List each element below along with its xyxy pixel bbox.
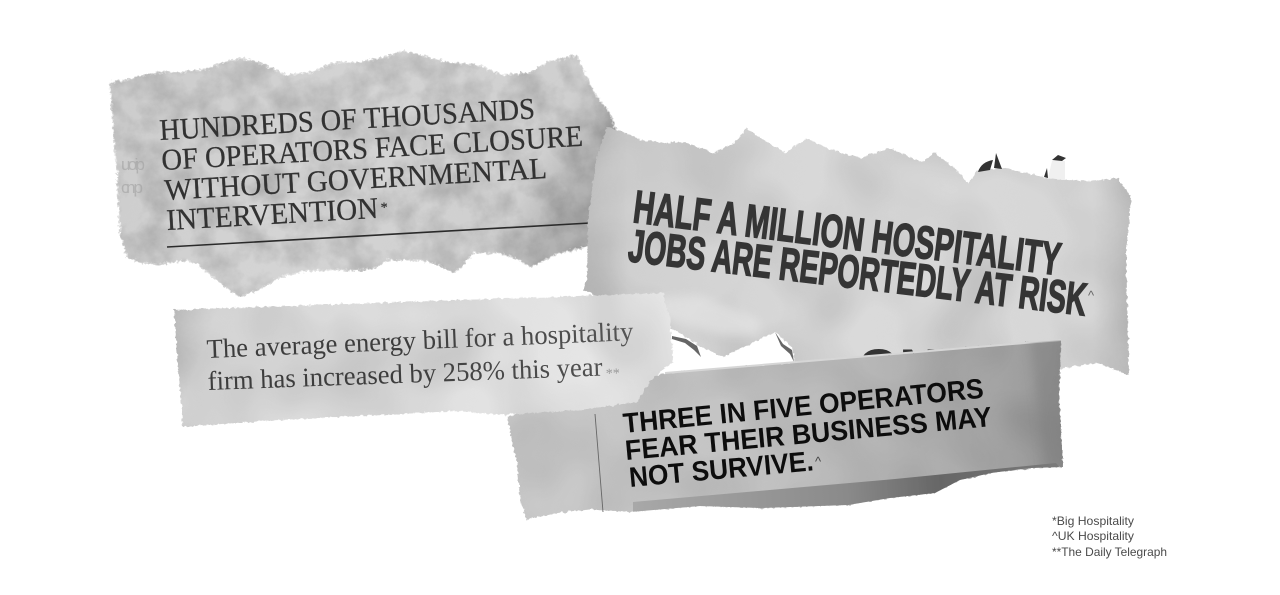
column rule [595,414,603,512]
paper: pale torn strip [174,293,673,427]
white flap at top [1048,161,1065,180]
headline [159,92,584,237]
headline: WITHOUT GOVERNMENTAL [164,152,548,207]
infographic: newspaper clippings collage [108,49,1166,558]
panel: energy bill clipping [174,293,673,427]
headline: * [380,201,388,216]
sentence [206,316,634,396]
paper: glossy clipping [507,340,1063,520]
headline: HUNDREDS OF THOUSANDS [159,92,536,147]
panel: hundreds of thousands clipping [110,51,618,297]
dark photo band [633,336,1070,520]
lighter creased fold [664,298,757,336]
headline [622,373,993,493]
sentence: firm has increased by 258% this year [207,352,603,396]
footnotes: sources: **The Daily Telegraph [1052,545,1167,559]
headline: INTERVENTION [166,192,379,237]
headline: NOT SURVIVE. [628,445,815,493]
top highlight [665,340,1061,373]
bleed-through text: uoip [121,155,145,174]
cut-off text fragment: ON [858,339,938,395]
footnotes: sources: *Big Hospitality [1052,514,1134,528]
sentence: ** [606,366,620,382]
footnotes: sources [1052,514,1167,559]
headline: THREE IN FIVE OPERATORS [622,373,985,439]
headline: OF OPERATORS FACE CLOSURE [161,120,584,177]
footnotes: sources: ^UK Hospitality [1052,529,1134,543]
paper: torn light newsprint [584,127,1131,400]
paper: torn grey newsprint [110,51,618,297]
sentence: The average energy bill for a hospitality [206,316,634,364]
headline [626,180,1090,326]
bleed-through text [121,155,145,197]
panel: half a million jobs clipping [584,127,1131,400]
source mark: ^ [1088,288,1095,303]
rule under headline [167,223,590,247]
torn dark edge fragments [672,153,1066,362]
source mark: ^ [815,454,822,469]
panel: three in five operators clipping [507,336,1070,520]
headline: FEAR THEIR BUSINESS MAY [624,401,993,466]
bleed-through text: cn p [121,178,143,197]
